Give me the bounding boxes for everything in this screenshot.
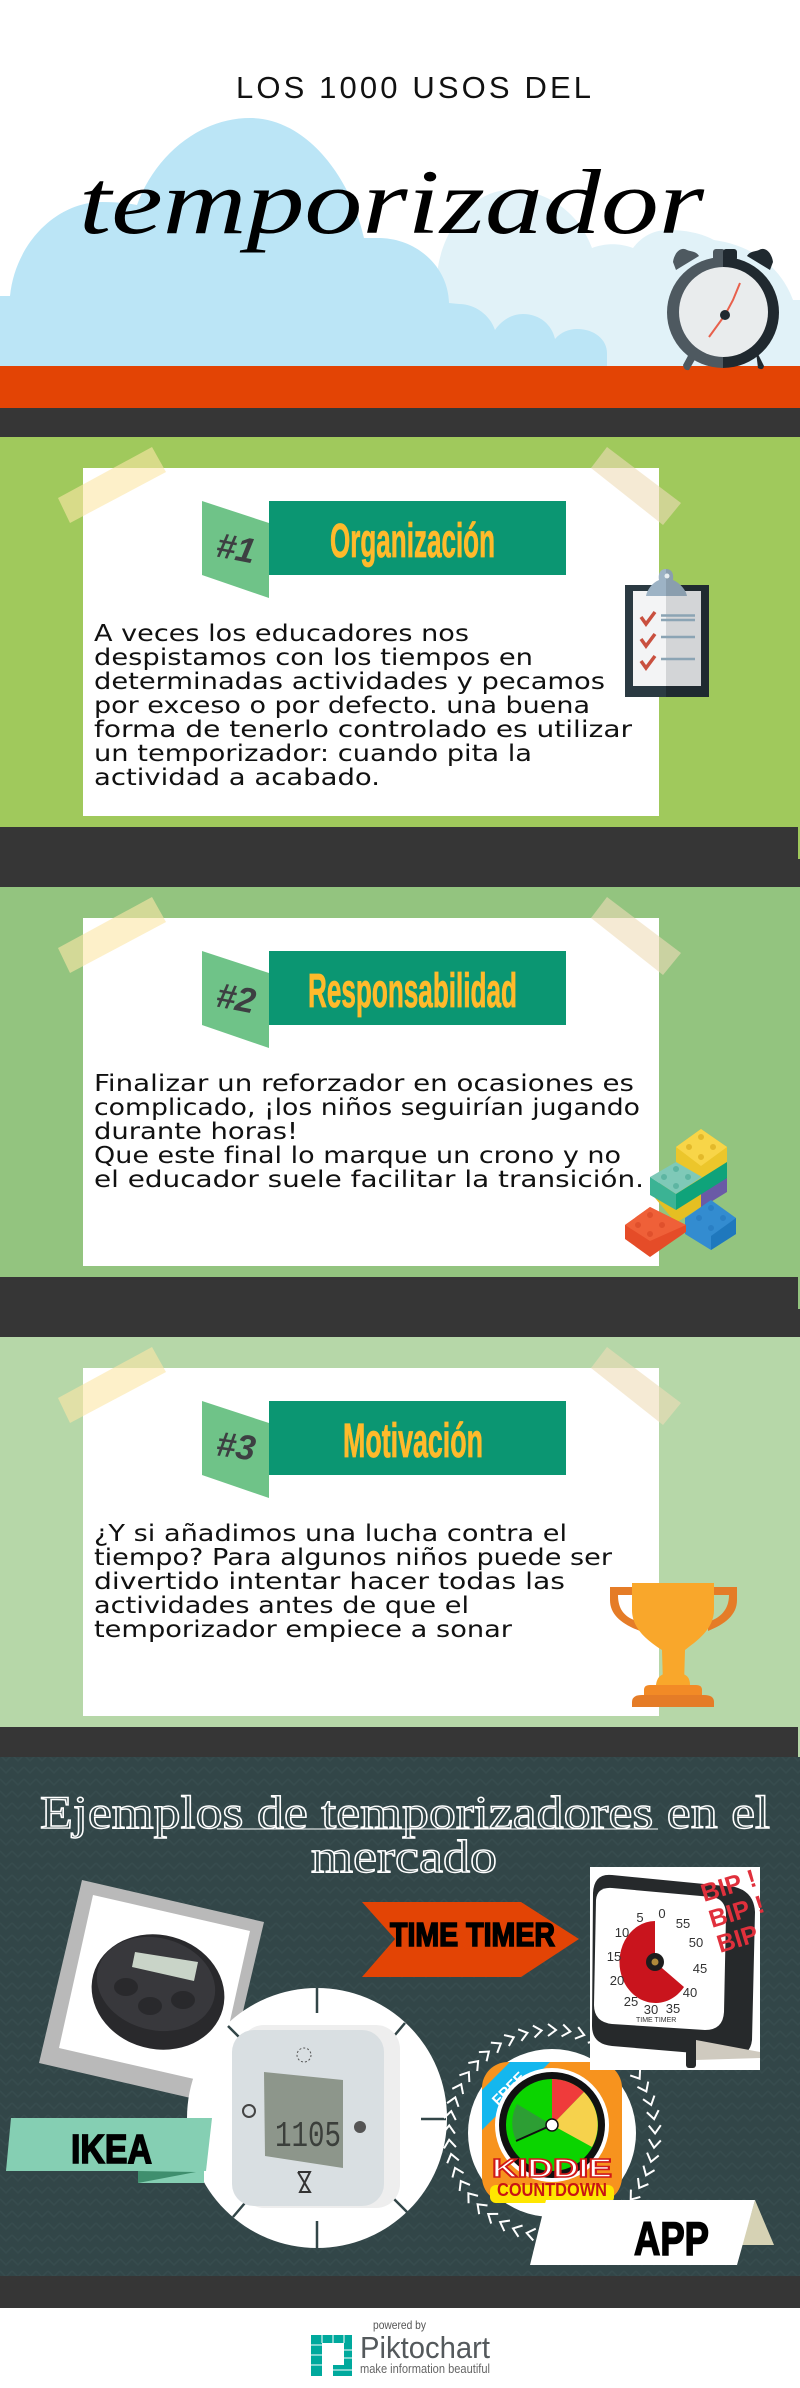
timer numbers: 35 xyxy=(666,2001,680,2016)
photo: ikea clock dial: 1105 xyxy=(275,2116,341,2157)
foreground cloud: blue xyxy=(0,118,607,366)
dark bar 3 xyxy=(0,1277,800,1337)
text block: un temporizador: cuando pita la xyxy=(94,741,532,767)
tape: right xyxy=(591,447,681,525)
background: green xyxy=(0,437,800,827)
icon: trophy xyxy=(610,1583,737,1707)
text block: determinadas actividades y pecamos xyxy=(94,669,605,695)
chevron ring xyxy=(443,2024,661,2242)
tape: left xyxy=(58,897,166,973)
text block: forma de tenerlo controlado es utilizar xyxy=(94,717,633,743)
text block: actividad a acabado. xyxy=(94,765,380,791)
tape: right xyxy=(591,1347,681,1425)
heading: ejemplos de temporizadores: Ejemplos de temporizadores en el xyxy=(40,1787,770,1839)
ribbon xyxy=(202,1401,566,1498)
ribbon: #1 xyxy=(213,526,259,571)
wordmark: Piktochart xyxy=(360,2330,490,2365)
background: green xyxy=(0,1337,800,1727)
section 4: ejemplos xyxy=(0,1757,800,2276)
panel: white card xyxy=(83,468,659,816)
logo mark xyxy=(311,2335,352,2376)
panel: white card xyxy=(83,1368,659,1716)
footer: piktochart xyxy=(311,2318,490,2376)
icon: alarm clock xyxy=(667,249,779,370)
text block: actividades antes de que el xyxy=(94,1593,469,1619)
background cloud: pale xyxy=(438,190,800,366)
text block: despistamos con los tiempos en xyxy=(94,645,533,671)
photo: ikea kitchen timer xyxy=(39,1880,264,2105)
app icon: kiddie countdown xyxy=(468,2049,636,2217)
app icon: kiddie countdown: COUNTDOWN xyxy=(497,2180,607,2200)
ribbon: Motivación xyxy=(343,1415,483,1468)
title: temporizador: temporizador xyxy=(79,151,705,253)
background: green xyxy=(0,887,800,1277)
ribbon: ikea: IKEA xyxy=(71,2126,152,2172)
timer numbers: 50 xyxy=(689,1935,703,1950)
bip text: BIP xyxy=(714,1920,762,1959)
ribbon: #3 xyxy=(214,1424,258,1469)
bip text: BIP ! xyxy=(698,1864,760,1908)
text block: A veces los educadores nos xyxy=(94,621,469,647)
timer numbers: 10 xyxy=(615,1925,629,1940)
text block: tiempo? Para algunos niños puede ser xyxy=(94,1545,613,1571)
timer numbers: 55 xyxy=(676,1916,690,1931)
arrow: time timer xyxy=(362,1902,579,1977)
app icon: kiddie countdown: FREE xyxy=(489,2069,529,2109)
tape: left xyxy=(58,447,166,523)
photo: time timer: TIME TIMER xyxy=(636,2017,676,2024)
dark bar 2 xyxy=(0,827,800,887)
timer numbers: 20 xyxy=(610,1973,624,1988)
ribbon xyxy=(202,951,566,1048)
dark bar 1 xyxy=(0,408,800,437)
powered by: powered by xyxy=(373,2318,426,2332)
text block: complicado, ¡los niños seguirían jugando xyxy=(94,1095,640,1121)
ribbon: Responsabilidad xyxy=(308,965,517,1018)
text block: durante horas! xyxy=(94,1119,298,1145)
dark bar 4 xyxy=(0,1727,800,1757)
header xyxy=(0,70,800,408)
section 2: responsabilidad xyxy=(0,887,800,1277)
ribbon: Organización xyxy=(330,515,495,568)
bip text xyxy=(698,1864,768,1959)
tape: right xyxy=(591,897,681,975)
heading: ejemplos de temporizadores xyxy=(40,1787,770,1883)
text block: Finalizar un reforzador en ocasiones es xyxy=(94,1071,634,1097)
photo: time timer xyxy=(590,1864,768,2070)
ribbon: ikea xyxy=(6,2118,212,2183)
timer numbers: 30 xyxy=(644,2002,658,2017)
text block: ¿Y si añadimos una lucha contra el xyxy=(94,1521,567,1547)
background: chalkboard xyxy=(0,1757,800,2276)
orange band xyxy=(0,366,800,408)
icon: lego blocks xyxy=(625,1129,736,1257)
text block: temporizador empiece a sonar xyxy=(94,1617,513,1643)
timer numbers: 40 xyxy=(683,1985,697,2000)
section 1: organización xyxy=(0,437,800,827)
timer numbers: 45 xyxy=(693,1961,707,1976)
heading: ejemplos de temporizadores: mercado xyxy=(311,1831,497,1883)
dark bar 5 xyxy=(0,2276,800,2308)
timer numbers xyxy=(607,1906,707,2017)
timer numbers: 5 xyxy=(636,1910,644,1925)
icon: clipboard xyxy=(625,569,709,697)
text block: el educador suele facilitar la transición. xyxy=(94,1167,644,1193)
ribbon: #2 xyxy=(213,976,259,1021)
section 3: motivación xyxy=(0,1337,800,1727)
tape: left xyxy=(58,1347,166,1423)
text block: divertido intentar hacer todas las xyxy=(94,1569,565,1595)
timer numbers: 15 xyxy=(607,1949,621,1964)
text block xyxy=(94,1071,644,1193)
tagline: make information beautiful xyxy=(360,2361,490,2376)
ribbon: app: APP xyxy=(634,2212,709,2265)
text block xyxy=(94,621,633,791)
text block: Que este final lo marque un crono y no xyxy=(94,1143,621,1169)
arrow: time timer: TIME TIMER xyxy=(390,1916,555,1953)
timer numbers: 0 xyxy=(658,1906,666,1921)
ribbon: app xyxy=(530,2200,774,2265)
bip text: BIP ! xyxy=(706,1890,768,1934)
ribbon xyxy=(202,501,566,598)
timer numbers: 25 xyxy=(624,1994,638,2009)
photo: ikea clock dial xyxy=(187,1988,447,2248)
app icon: kiddie countdown: KIDDIE xyxy=(492,2153,612,2183)
text block: por exceso o por defecto. una buena xyxy=(94,693,590,719)
title: los 1000 usos del: LOS 1000 USOS DEL xyxy=(236,70,591,105)
text block xyxy=(94,1521,613,1643)
panel: white card xyxy=(83,918,659,1266)
